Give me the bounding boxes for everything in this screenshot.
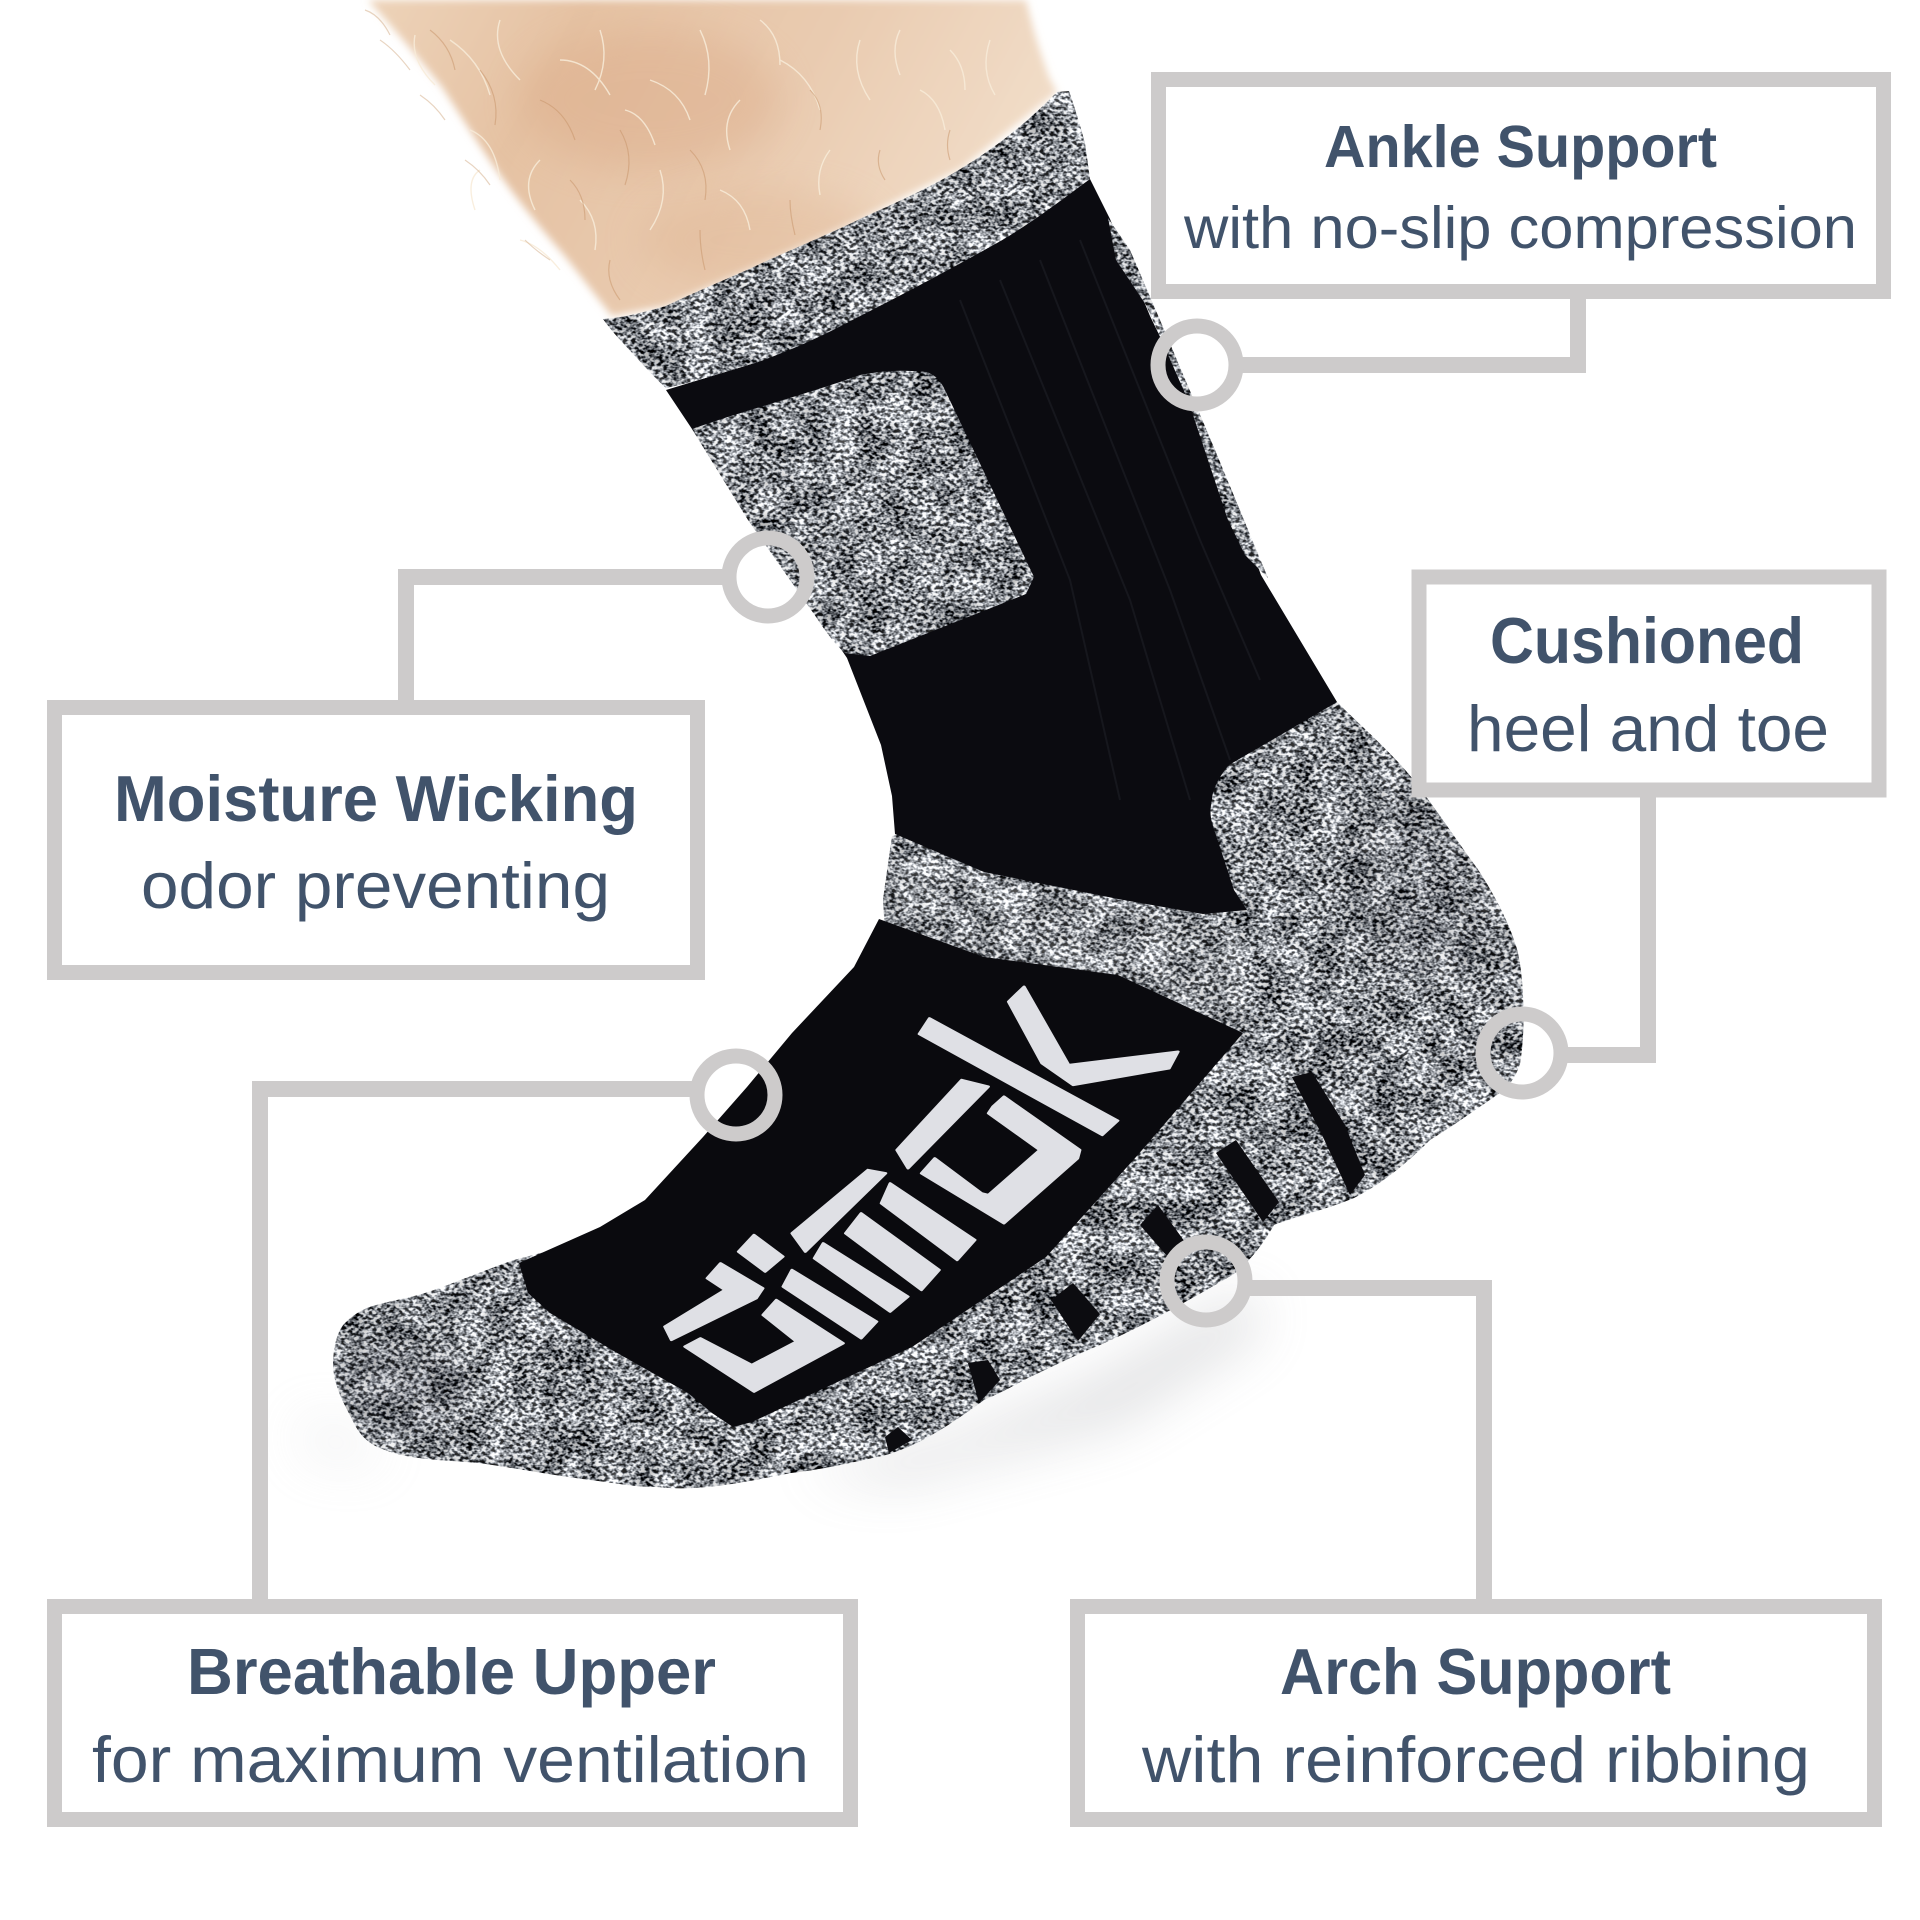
callout: ankle support bbox=[1158, 80, 1884, 404]
subtext: moisture wicking: odor preventing bbox=[141, 849, 610, 922]
heading: cushioned: Cushioned bbox=[1490, 604, 1804, 677]
label box: cushioned bbox=[1419, 577, 1879, 790]
heel and foot knit bbox=[320, 690, 1540, 1500]
subtext: cushioned: heel and toe bbox=[1467, 692, 1829, 765]
subtext: ankle support: with no-slip compression bbox=[1183, 195, 1857, 261]
subtext: breathable upper: for maximum ventilation bbox=[92, 1723, 809, 1796]
label box: moisture wicking bbox=[54, 708, 698, 972]
callout: moisture wicking bbox=[54, 538, 807, 972]
connector: breathable upper bbox=[260, 1089, 695, 1610]
back strip bbox=[1108, 218, 1268, 578]
edge hair bbox=[365, 10, 550, 260]
callout: cushioned heel and toe bbox=[1419, 577, 1879, 1092]
leg with skin bbox=[365, 0, 1057, 316]
sole ribbing stripes bbox=[885, 1072, 1365, 1453]
leg hair bbox=[414, 20, 995, 270]
connector: moisture wicking bbox=[406, 577, 725, 710]
callout: arch support bbox=[1078, 1242, 1874, 1820]
cuff bbox=[603, 91, 1090, 388]
heading: ankle support: Ankle Support bbox=[1324, 114, 1717, 180]
heading: moisture wicking: Moisture Wicking bbox=[114, 762, 638, 835]
leg ribbing bbox=[960, 240, 1260, 800]
marker ring: cushioned bbox=[1483, 1014, 1561, 1092]
black leg section bbox=[666, 179, 1337, 914]
floor shadow bbox=[300, 1290, 1260, 1480]
subtext: arch support: with reinforced ribbing bbox=[1141, 1723, 1810, 1796]
black foot section bbox=[519, 919, 1243, 1427]
ankle patch bbox=[692, 370, 1034, 656]
marker ring: breathable upper bbox=[697, 1056, 775, 1134]
label box: arch support bbox=[1078, 1606, 1874, 1820]
marker ring: ankle support bbox=[1158, 326, 1236, 404]
label box: ankle support bbox=[1158, 80, 1884, 292]
connector: arch support bbox=[1248, 1288, 1484, 1610]
marker ring: arch support bbox=[1167, 1242, 1245, 1320]
heading: breathable upper: Breathable Upper bbox=[187, 1635, 716, 1708]
connector: cushioned bbox=[1565, 790, 1648, 1055]
callout: breathable upper bbox=[54, 1056, 850, 1820]
label box: breathable upper bbox=[54, 1606, 850, 1820]
connector: ankle support bbox=[1235, 290, 1578, 365]
sock bbox=[320, 80, 1540, 1500]
logo lettering bbox=[665, 987, 1178, 1392]
heading: arch support: Arch Support bbox=[1280, 1635, 1671, 1708]
marker ring: moisture wicking bbox=[729, 538, 807, 616]
